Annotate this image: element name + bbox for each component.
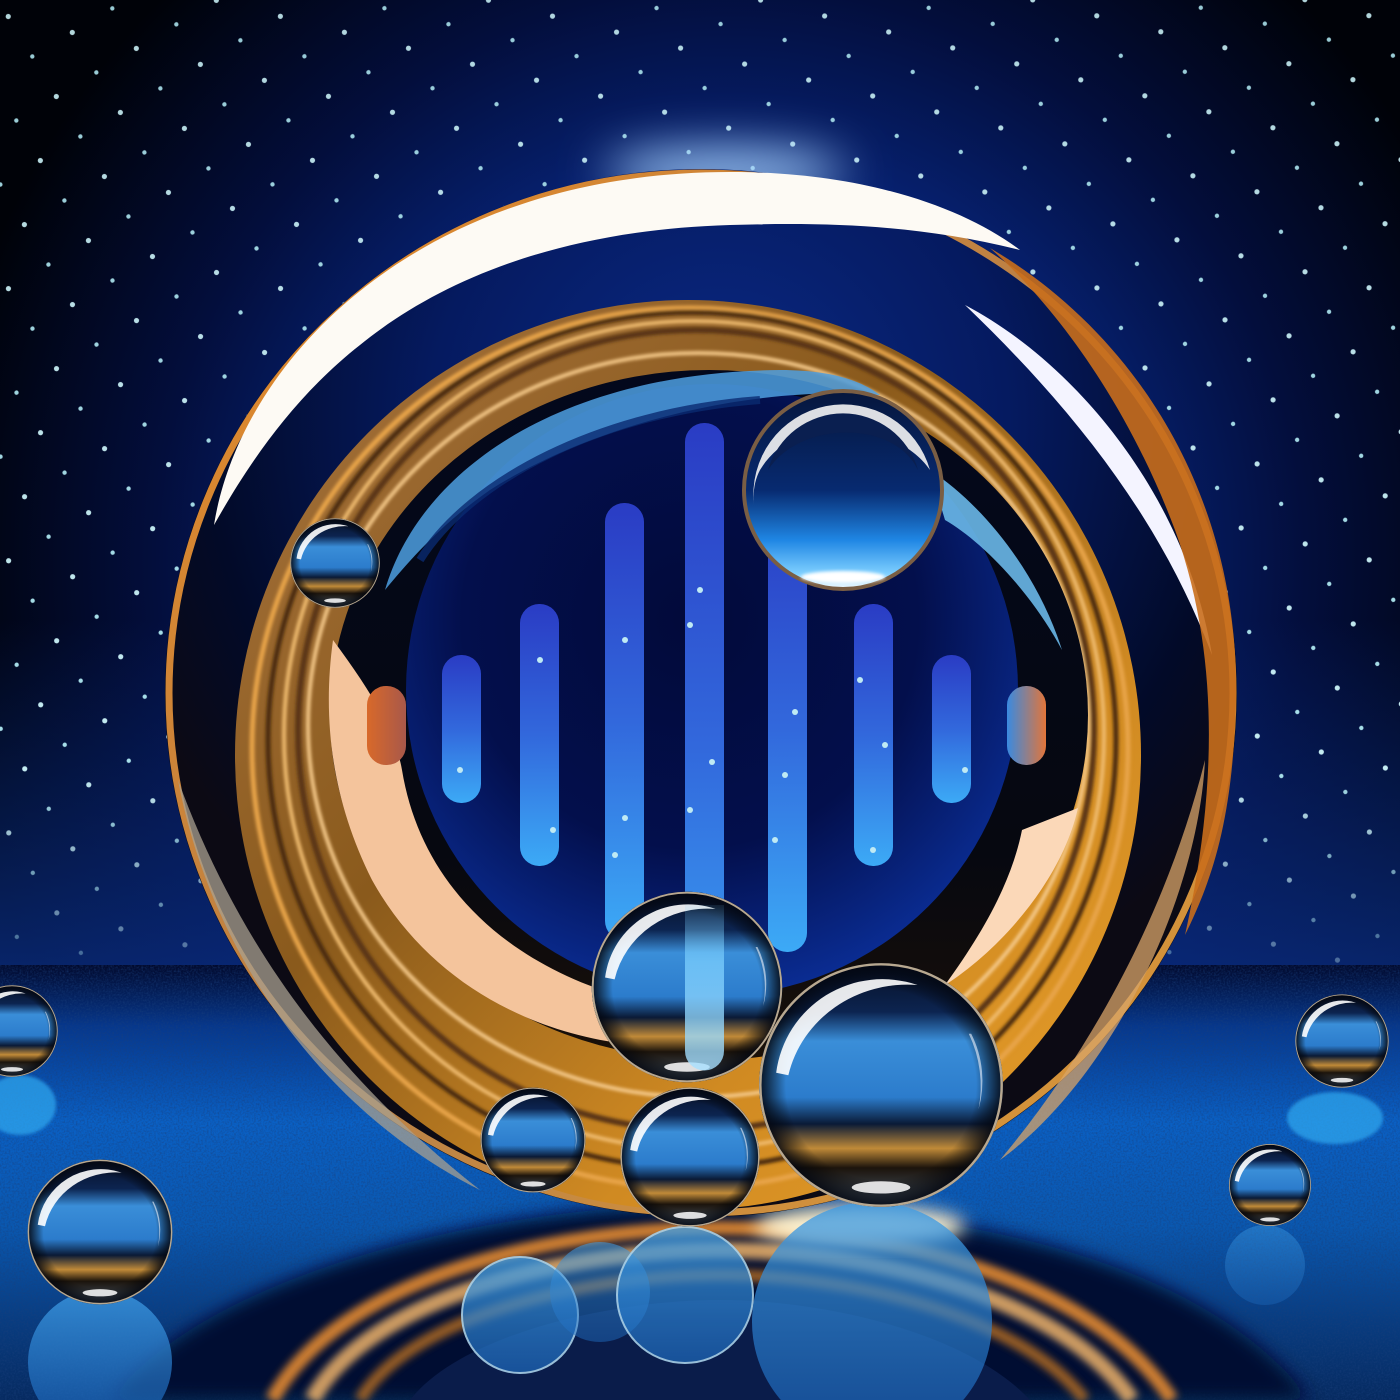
droplet: left on ring — [290, 518, 380, 608]
background: dotted star field — [0, 0, 1400, 965]
droplet: center — [592, 892, 782, 1082]
reflected droplets on floor — [0, 1075, 1383, 1400]
droplet: upper right large — [743, 390, 943, 590]
droplet: far right — [1295, 994, 1389, 1088]
glow behind top of sphere — [605, 150, 845, 194]
right white crescent — [965, 305, 1212, 655]
bar 1 — [367, 686, 406, 765]
pale inner band lower right — [945, 808, 1078, 985]
specks on bars — [457, 587, 968, 858]
gold ring strands — [252, 308, 1128, 1188]
bar 5 seen over center droplet — [685, 905, 724, 1070]
droplet: far left edge — [0, 985, 58, 1077]
droplet: right small — [1229, 1144, 1311, 1226]
pale inner band lower left — [329, 640, 650, 1046]
dark band around hole — [330, 370, 1088, 1060]
bar 5 — [685, 423, 724, 1070]
glass ring — [165, 169, 1237, 1217]
droplet: floor left large — [28, 1160, 172, 1304]
droplet: lower center — [620, 1087, 760, 1227]
left lower glass tint — [178, 780, 480, 1190]
right orange rim band — [990, 248, 1236, 935]
bar 6 — [768, 503, 807, 952]
bar 4 — [605, 503, 644, 940]
right lower glass tint — [1000, 760, 1205, 1160]
outer sphere body — [165, 169, 1237, 1217]
droplet: large lower right — [759, 963, 1003, 1207]
floor: blue surface — [0, 965, 1400, 1400]
bar 2 — [442, 655, 481, 803]
floor: grain texture — [0, 965, 1400, 1400]
inner hole — [406, 384, 1018, 996]
blue swirl streak upper — [385, 370, 880, 590]
floor: dark shadow pool with reflection — [110, 1205, 1310, 1400]
outer orange rim — [169, 173, 1233, 1213]
bar 8 — [932, 655, 971, 803]
sound wave bars — [367, 423, 1046, 1070]
gold inner ring — [235, 300, 1141, 1210]
bar 7 — [854, 604, 893, 866]
background: lower blue haze — [0, 620, 1400, 965]
right blue swirl streak — [930, 470, 1062, 650]
droplet: small lower left of ring — [481, 1088, 585, 1192]
top white highlight crescent — [214, 172, 1020, 525]
bar 3 — [520, 604, 559, 866]
bar 9 — [1007, 686, 1046, 765]
blue swirl streak dark line — [420, 400, 760, 560]
